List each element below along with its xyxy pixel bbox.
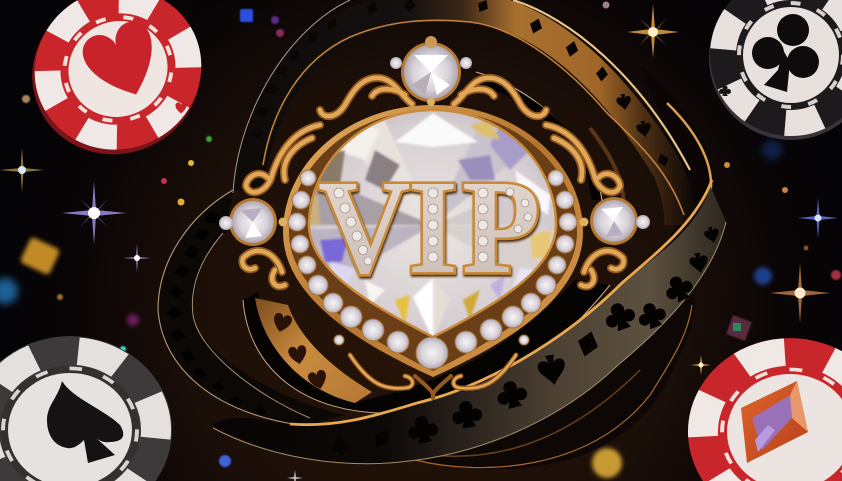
suits on main ribbon [329,225,721,456]
poker chip: black club [709,0,842,140]
ring: outer dark crescent [640,65,711,297]
VIP lettering: VIP [318,153,540,302]
ring: left lower ribbon with diamonds [158,190,345,426]
sparkle: left upper [0,148,44,192]
diamond suits on left ribbon [166,209,267,417]
icon: ruby diamond [741,381,808,463]
ring: main lower ribbon with suits [212,180,726,464]
left gemstone [219,198,288,246]
ring: inner thin arc on right [476,72,623,215]
poker chip: red heart [5,0,229,182]
icon: spade [47,381,123,463]
ring: far lower ribbon [395,295,695,469]
sparkle: left middle [62,181,126,245]
sparkle: lower right small [691,355,711,375]
center diamond [310,111,555,336]
suits on upper ribbon [249,0,671,168]
ornate scrollwork right [433,78,624,398]
icon: club [752,14,819,92]
sparkle: gold top right [627,4,679,58]
poker chip: black spade [0,326,184,481]
hearts on inner gold ribbon [271,312,329,391]
scrollwork left highlight [242,78,412,388]
stones inside letters [334,188,532,265]
sparkle: bottom [287,470,303,481]
ring: inner black and gold ribbon [243,280,610,413]
right gemstone [580,197,650,245]
top gemstone [390,36,472,106]
icon: heart [77,16,169,108]
sparkle: right upper [798,198,838,238]
gold frame [283,105,583,377]
sparkle: right lower [770,263,830,323]
ring of stones [288,170,577,369]
VIP badge [219,36,650,398]
poker chip: red diamond [688,338,842,481]
ring: upper ribbon with suits [233,0,711,297]
scrollwork right highlight [454,78,624,388]
sparkle: left small [123,244,151,272]
ornate scrollwork left [242,78,433,398]
